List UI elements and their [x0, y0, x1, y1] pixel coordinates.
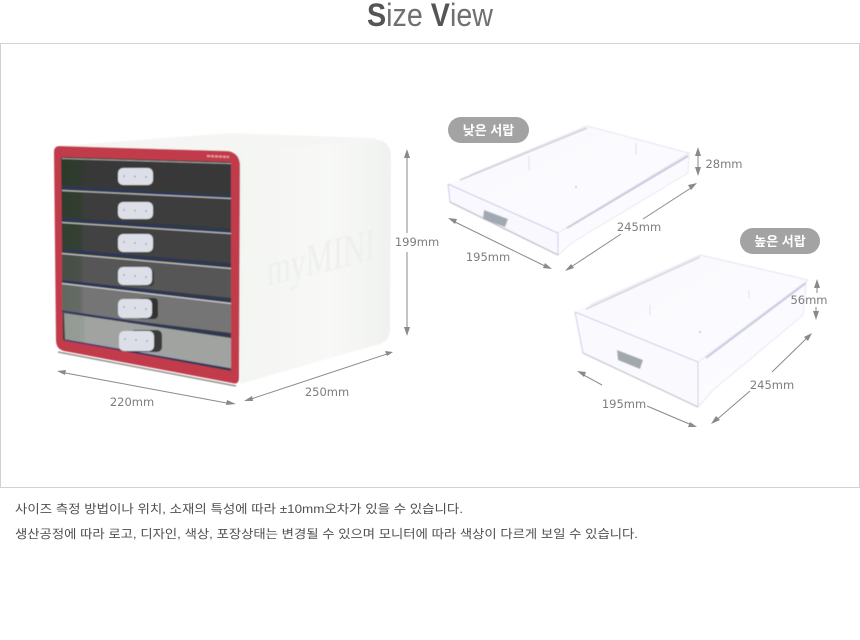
- drawer opening: [61, 157, 231, 371]
- dimension: low drawer depth 195mm: [448, 218, 552, 269]
- cabinet front frame: [54, 146, 240, 383]
- dimension: high drawer height 56mm: [790, 279, 828, 320]
- dimension: high drawer length 245mm: [711, 333, 812, 424]
- dimension: high drawer depth 195mm: 195mm: [602, 397, 646, 411]
- dimension: high drawer depth 195mm: [577, 371, 697, 427]
- embossed logo: myMINI: [267, 219, 375, 297]
- cabinet base shadow: [58, 352, 236, 386]
- high drawer handle: [617, 350, 643, 369]
- drawer 3: [62, 222, 231, 265]
- dimension: 199mm: [395, 149, 439, 336]
- label: high drawer: 높은 서랍: [754, 234, 806, 249]
- drawer 4: [62, 253, 231, 301]
- panel: size view: [0, 44, 860, 488]
- dimension: 220mm: [57, 370, 236, 409]
- dimension: low drawer length 245mm: [565, 183, 697, 271]
- drawer 6: [64, 313, 231, 369]
- cabinet top face: [58, 133, 388, 160]
- cabinet illustration: [54, 133, 391, 386]
- cabinet side face: [236, 140, 391, 384]
- notes text: 생산공정에 따라 로고, 디자인, 색상, 포장상태는 변경될 수 있으며 모니터에 따라 색상이 다르게 보일 수 있습니다.: [15, 527, 638, 541]
- dimension: 220mm: 220mm: [110, 395, 154, 409]
- dimension: low drawer height 28mm: 28mm: [705, 157, 743, 171]
- drawer 1: [62, 158, 231, 197]
- dimension: 199mm: 199mm: [395, 235, 439, 249]
- low drawer handle: [483, 210, 508, 227]
- dimension: high drawer height 56mm: 56mm: [790, 293, 828, 307]
- drawer 2: [62, 190, 231, 231]
- dimension: low drawer height 28mm: [695, 147, 743, 176]
- label: low drawer: [448, 117, 529, 143]
- dimension: low drawer depth 195mm: 195mm: [466, 250, 510, 264]
- frame brand mark: [207, 156, 229, 157]
- drawer 5: [62, 283, 231, 336]
- dimension: high drawer length 245mm: 245mm: [750, 378, 794, 392]
- notes text: 사이즈 측정 방법이나 위치, 소재의 특성에 따라 ±10mm오차가 있을 수 있습니다.: [15, 502, 463, 516]
- dimension: 250mm: 250mm: [305, 385, 349, 399]
- label: low drawer: 낮은 서랍: [463, 123, 514, 138]
- label: high drawer: [740, 228, 820, 254]
- high drawer: [575, 255, 808, 407]
- dimension: low drawer length 245mm: 245mm: [617, 220, 661, 234]
- notes text: [15, 502, 638, 541]
- dimension: 250mm: [244, 351, 393, 401]
- low drawer: [448, 126, 689, 255]
